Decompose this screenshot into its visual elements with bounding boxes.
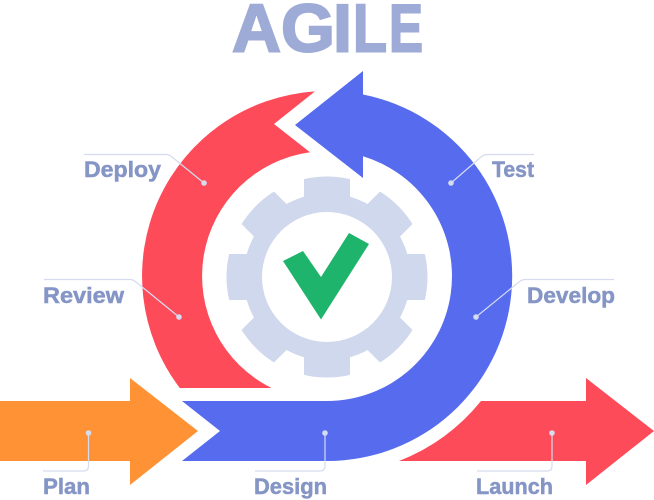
label: Design bbox=[254, 430, 328, 499]
label: Deploy bbox=[84, 154, 207, 186]
arrow: review and deploy (red arc) bbox=[142, 91, 315, 388]
label: Review bbox=[43, 280, 182, 320]
label: Test: Test bbox=[492, 157, 535, 182]
icon: green check mark bbox=[283, 233, 369, 320]
label: Review: Review bbox=[43, 283, 125, 308]
label: Plan bbox=[43, 430, 91, 499]
label: Launch bbox=[476, 430, 555, 499]
arrow: design, develop and test (blue arc) bbox=[182, 71, 512, 461]
label: Plan: Plan bbox=[43, 474, 90, 499]
label: Launch: Launch bbox=[476, 474, 553, 499]
label: Deploy: Deploy bbox=[84, 157, 162, 182]
arrow: plan (orange) bbox=[0, 378, 198, 485]
label: Test bbox=[448, 154, 535, 186]
arrow: launch (red) bbox=[399, 378, 654, 485]
label: Design: Design bbox=[254, 474, 327, 499]
label: Develop: Develop bbox=[527, 283, 615, 308]
icon: gear bbox=[226, 176, 428, 378]
label: Develop bbox=[473, 280, 615, 320]
